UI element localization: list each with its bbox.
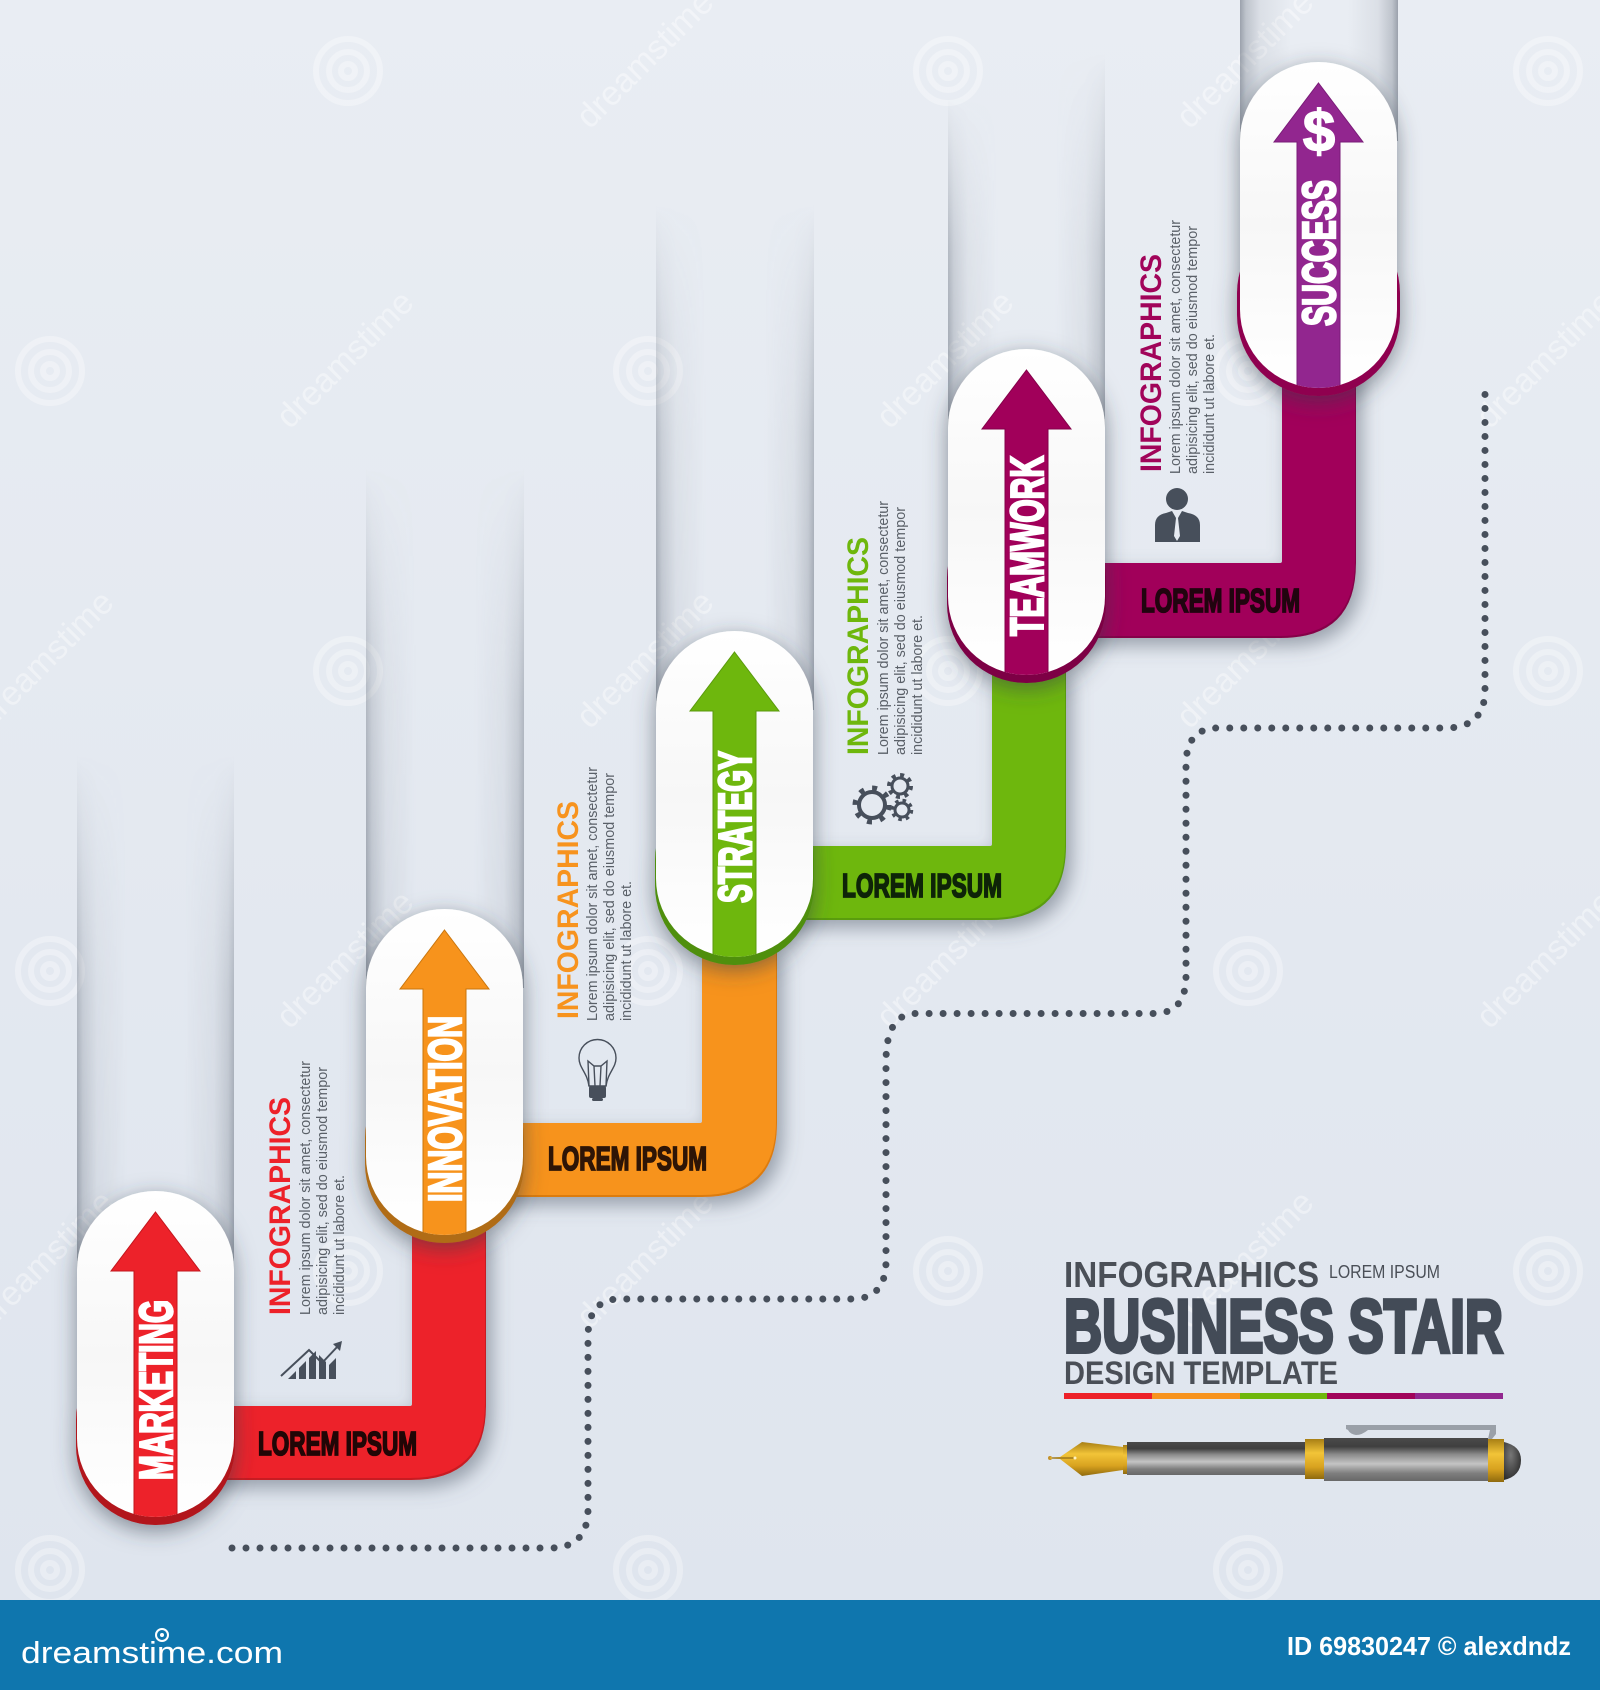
icon: growth chart	[281, 1341, 342, 1379]
pill: marketing	[76, 1191, 235, 1525]
text block: step 2	[552, 767, 635, 1021]
icon: fountain pen	[1048, 1425, 1521, 1482]
text block: step 1: adipisicing elit, sed do eiusmod tempor	[315, 1067, 331, 1315]
footer id: ID 69830247 © alexdndz	[1287, 1631, 1571, 1661]
text block: step 1: incididunt ut labore et.	[332, 1175, 348, 1315]
text block: step 2: INFOGRAPHICS	[552, 801, 585, 1019]
band label: red: LOREM IPSUM	[258, 1425, 417, 1462]
watermark spirals and text: dreamstime	[1169, 1183, 1321, 1336]
band label: green: LOREM IPSUM	[842, 867, 1002, 904]
pill: success: SUCCESS	[1293, 180, 1345, 326]
icon: light bulb	[579, 1040, 616, 1101]
text block: step 4: Lorem ipsum dolor sit amet, consectetur	[1168, 220, 1184, 474]
title block: DESIGN TEMPLATE	[1064, 1355, 1338, 1391]
watermark spirals and text: dreamstime	[1169, 583, 1321, 736]
text block: step 2: incididunt ut labore et.	[619, 881, 635, 1021]
band: red	[200, 1230, 486, 1480]
pill: success	[1237, 62, 1400, 396]
pill: marketing: MARKETING	[130, 1300, 182, 1480]
watermark spirals and text: dreamstime	[869, 883, 1021, 1036]
pill: innovation	[365, 909, 524, 1243]
text block: step 4: INFOGRAPHICS	[1135, 254, 1168, 472]
text block: step 4	[1135, 220, 1218, 474]
column shadows above the pills	[77, 0, 1398, 1270]
watermark spirals and text: dreamstime	[269, 883, 421, 1036]
text block: step 3: incididunt ut labore et.	[910, 615, 926, 755]
text block: step 3: adipisicing elit, sed do eiusmod tempor	[893, 507, 909, 755]
text block: step 4: adipisicing elit, sed do eiusmod tempor	[1185, 226, 1201, 474]
pill: teamwork	[947, 349, 1106, 683]
text block: step 3: INFOGRAPHICS	[842, 537, 875, 755]
text block: step 1	[264, 1061, 348, 1315]
text block: step 4: incididunt ut labore et.	[1202, 334, 1218, 474]
text block: step 1: INFOGRAPHICS	[264, 1097, 297, 1315]
pill: teamwork: TEAMWORK	[1001, 456, 1053, 636]
dotted path	[232, 388, 1485, 1548]
title block	[1064, 1254, 1503, 1391]
band label: magenta: LOREM IPSUM	[1141, 582, 1300, 619]
footer logo: dreamstime.com	[21, 1635, 283, 1670]
icon: businessman	[1155, 488, 1200, 542]
text block: step 3	[842, 501, 926, 755]
pill: innovation: INNOVATION	[419, 1016, 471, 1202]
watermark spirals and text: dreamstime	[869, 283, 1021, 436]
band: green	[780, 670, 1066, 920]
pill: strategy: STRATEGY	[709, 751, 761, 903]
title block: INFOGRAPHICS	[1064, 1254, 1319, 1295]
footer bar	[0, 1600, 1600, 1690]
pill: strategy	[655, 631, 814, 965]
watermark spirals and text: dreamstime	[569, 583, 721, 736]
band: magenta	[1072, 370, 1356, 638]
watermark spirals and text: dreamstime	[569, 1183, 721, 1336]
icon: gears	[855, 775, 912, 822]
text block: step 1: Lorem ipsum dolor sit amet, consectetur	[298, 1061, 314, 1315]
pill: success: $	[1303, 99, 1335, 164]
watermark spirals and text: dreamstime	[269, 283, 421, 436]
title block: LOREM IPSUM	[1329, 1262, 1440, 1282]
band label: orange: LOREM IPSUM	[548, 1140, 707, 1177]
text block: step 2: Lorem ipsum dolor sit amet, consectetur	[585, 767, 601, 1021]
text block: step 3: Lorem ipsum dolor sit amet, consectetur	[876, 501, 892, 755]
band: orange	[490, 950, 777, 1197]
colour bar	[1064, 1393, 1503, 1399]
text block: step 2: adipisicing elit, sed do eiusmod tempor	[602, 773, 618, 1021]
